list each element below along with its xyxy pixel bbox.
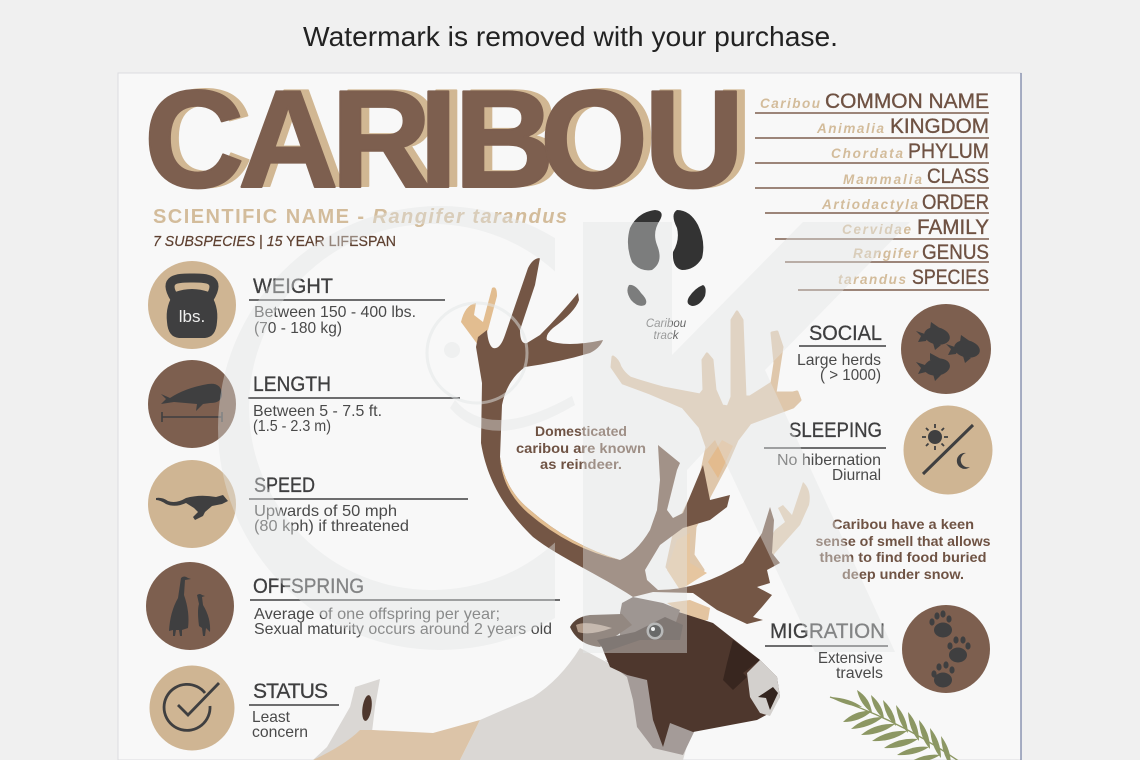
nostril	[758, 687, 778, 710]
watermark: CK logo	[218, 206, 910, 653]
taxonomy list: Chordata	[831, 146, 903, 161]
eye	[646, 622, 664, 640]
weight text: (70 - 180 kg)	[254, 320, 342, 337]
icon: status check	[150, 666, 234, 750]
taxonomy list: PHYLUM	[908, 139, 989, 163]
watermark: small circle	[427, 303, 527, 403]
sleeping text	[764, 419, 886, 484]
icon: speed cheetah	[148, 460, 236, 548]
front antler small tine	[461, 287, 497, 345]
callout: reindeer: caribou are known	[516, 440, 646, 456]
callout: reindeer	[516, 423, 646, 472]
social text: ( > 1000)	[820, 367, 881, 384]
icon: weight kettlebell	[148, 261, 236, 349]
icon: migration paws	[902, 605, 990, 693]
track caption: track	[654, 330, 680, 342]
callout: reindeer: as reindeer.	[540, 456, 622, 472]
taxonomy list: CLASS	[927, 164, 989, 188]
ear on back	[313, 679, 380, 760]
callout: smell: them to find food buried	[820, 549, 986, 565]
icon: weight kettlebell: lbs.	[179, 307, 205, 326]
eye band	[597, 617, 683, 652]
icon: length whale	[148, 360, 236, 448]
weight text: WEIGHT	[253, 275, 333, 298]
offspring text: Sexual maturity occurs around 2 years old	[254, 621, 552, 638]
illustration: caribou	[313, 258, 810, 760]
antler highlight	[500, 457, 620, 560]
sleeping text: No hibernation	[777, 452, 881, 469]
offspring text	[250, 575, 560, 638]
offspring text: OFFSPRING	[253, 575, 364, 598]
taxonomy list: COMMON NAME	[825, 89, 989, 113]
taxonomy list: SPECIES	[912, 265, 989, 289]
scientific name: SCIENTIFIC NAME - Rangifer tarandus	[153, 206, 567, 228]
speed text: Upwards of 50 mph	[254, 503, 397, 520]
rump	[313, 720, 480, 760]
length text: (1.5 - 2.3 m)	[253, 418, 331, 435]
back antler stem	[667, 533, 707, 590]
taxonomy list: Mammalia	[843, 172, 922, 187]
ear inner	[361, 695, 373, 721]
poster panel	[118, 73, 1021, 760]
panel right edge	[1020, 73, 1022, 760]
speed text: (80 kph) if threatened	[254, 518, 409, 535]
taxonomy list: KINGDOM	[890, 114, 989, 138]
back antler	[612, 312, 800, 585]
icon: sleeping sun and moon	[904, 406, 992, 494]
social text	[797, 322, 886, 384]
callout: smell: Caribou have a keen	[832, 516, 974, 532]
track caption	[646, 318, 687, 342]
back antler orange core	[708, 440, 733, 478]
migration text	[765, 620, 888, 682]
taxonomy list: FAMILY	[917, 215, 989, 239]
icon: social fish	[901, 304, 991, 394]
taxonomy list: ORDER	[922, 190, 989, 214]
social text: Large herds	[797, 352, 881, 369]
migration text: travels	[836, 665, 883, 682]
migration text: MIGRATION	[770, 620, 885, 643]
status text	[249, 680, 339, 741]
status text: concern	[252, 724, 308, 741]
track caption: Caribou	[646, 318, 687, 330]
muzzle	[747, 660, 780, 716]
sleeping text: SLEEPING	[789, 419, 882, 442]
callout: smell: sense of smell that allows	[816, 533, 991, 549]
taxonomy list: Caribou	[760, 96, 821, 111]
icon: caribou track	[627, 210, 706, 306]
callout: smell	[816, 516, 991, 582]
taxonomy list: tarandus	[838, 272, 906, 287]
back antler lower tines	[761, 482, 810, 565]
length text	[248, 373, 460, 435]
head	[600, 607, 780, 747]
antler base patch	[667, 600, 710, 622]
title: CARIBOU: CARIBOU	[144, 62, 744, 217]
sleeping text: Diurnal	[832, 467, 881, 484]
neck mane	[605, 660, 695, 755]
ear	[570, 614, 632, 647]
weight text: Between 150 - 400 lbs.	[254, 304, 416, 321]
taxonomy list: GENUS	[922, 240, 989, 264]
weight text	[249, 275, 445, 337]
body	[460, 648, 690, 760]
front antler	[476, 258, 780, 624]
taxonomy list: Animalia	[816, 121, 884, 136]
length text: Between 5 - 7.5 ft.	[253, 403, 382, 420]
ear inner highlight	[576, 623, 612, 633]
status text: STATUS	[253, 680, 328, 703]
title: CARIBOU: CARIBOU	[152, 61, 752, 216]
social text: SOCIAL	[809, 322, 882, 345]
taxonomy list: Rangifer	[853, 246, 919, 261]
fern leaf	[830, 690, 960, 760]
callout: smell: deep under snow.	[842, 566, 964, 582]
subspecies and lifespan: 7 SUBSPECIES | 15 YEAR LIFESPAN	[153, 233, 396, 250]
taxonomy list: Cervidae	[842, 222, 911, 237]
taxonomy list: Artiodactyla	[821, 197, 918, 212]
icon: offspring birds	[146, 562, 234, 650]
callout: reindeer: Domesticated	[535, 423, 627, 439]
speed text	[249, 474, 468, 535]
migration text: Extensive	[818, 650, 883, 667]
offspring text: Average of one offspring per year;	[254, 606, 500, 623]
forehead	[620, 597, 680, 640]
length text: LENGTH	[253, 373, 331, 396]
speed text: SPEED	[254, 474, 315, 497]
muzzle dark patch	[723, 640, 760, 690]
taxonomy list	[755, 89, 989, 290]
watermark notice: Watermark is removed with your purchase.	[303, 21, 838, 52]
status text: Least	[252, 709, 291, 726]
